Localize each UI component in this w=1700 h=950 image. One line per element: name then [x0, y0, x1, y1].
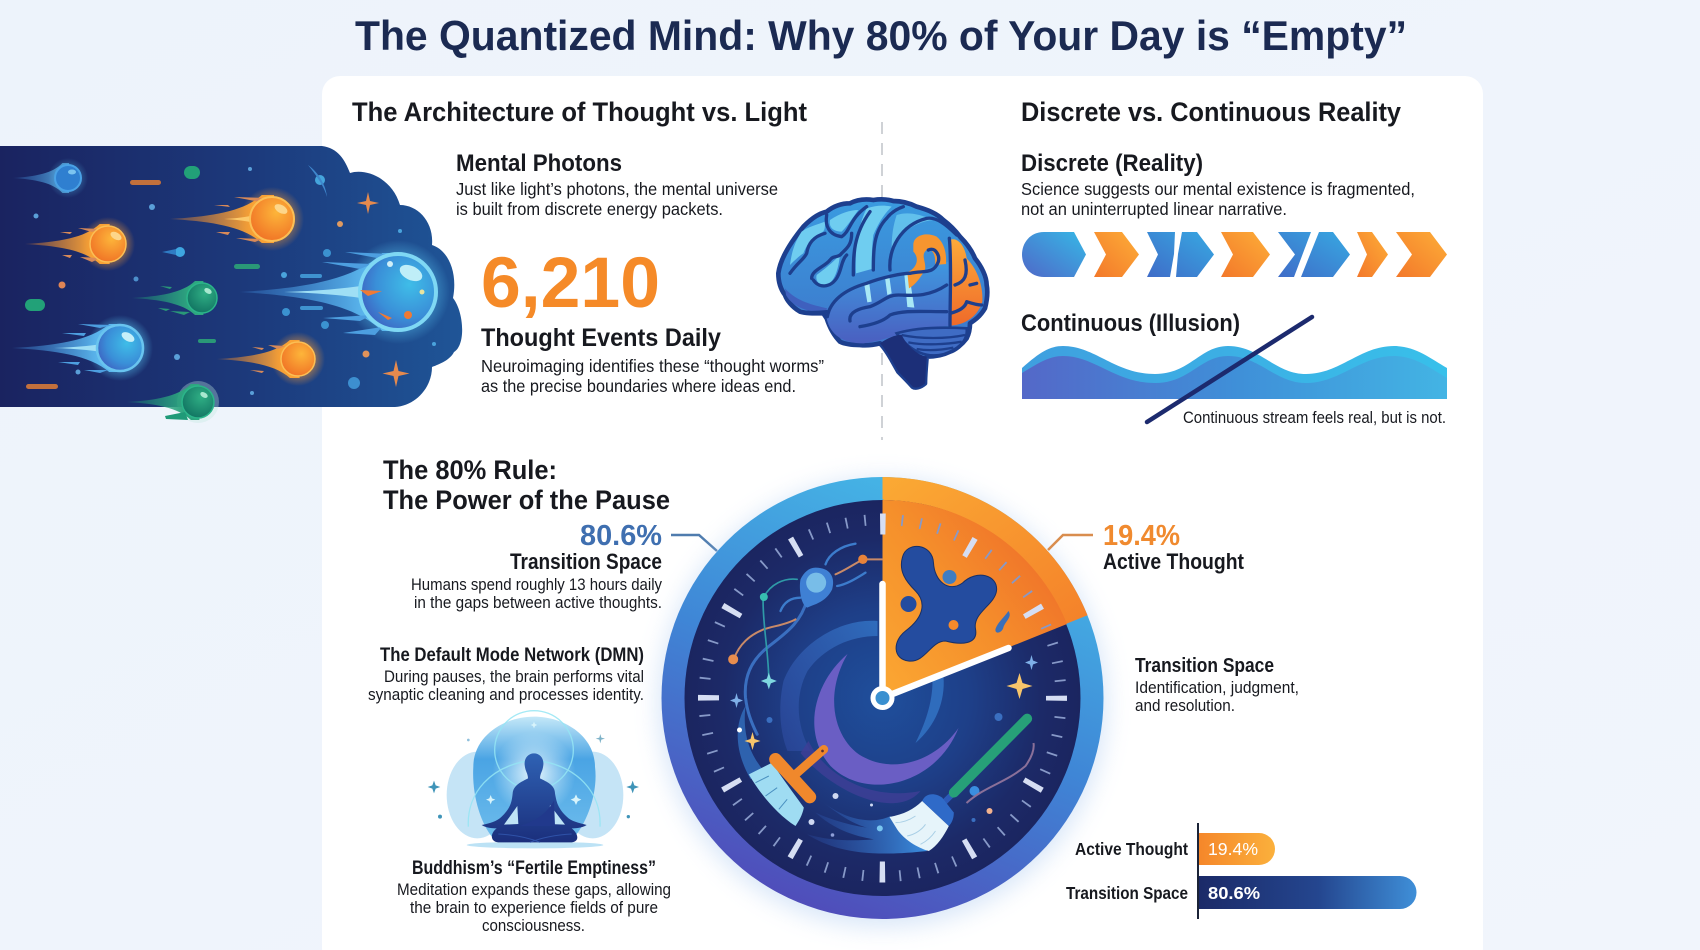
swirl [738, 621, 958, 803]
text block: transition space: and resolution. [1135, 697, 1235, 715]
row: transition space: 80.6% [1208, 883, 1260, 903]
text block: fertile emptiness: Buddhism’s “Fertile Emptiness” [412, 858, 656, 879]
sparkles on face [744, 673, 1032, 750]
text block: discrete reality: Discrete (Reality) [1021, 150, 1203, 177]
comet: green bottom [127, 381, 219, 423]
row: transition space: Transition Space [1066, 883, 1188, 903]
divider: dashed vertical [881, 122, 883, 440]
text block: default mode network: During pauses, the brain performs vital [384, 668, 644, 686]
text block: fertile emptiness: Meditation expands these gaps, allowing [397, 881, 671, 899]
callout: 80.6% transition space: in the gaps between active thoughts. [414, 594, 662, 612]
text block: discrete reality: not an uninterrupted linear narrative. [1021, 199, 1287, 219]
clock face [684, 500, 1080, 896]
text block: fertile emptiness: the brain to experience fields of pure [410, 899, 658, 917]
text block: default mode network: synaptic cleaning and processes identity. [368, 686, 644, 704]
stat: 6,210 thought events: Neuroimaging identifies these “thought worms” [481, 356, 824, 376]
text block: mental photons [456, 150, 778, 219]
chart: clock pie [658, 477, 1106, 927]
text block: mental photons: Just like light’s photons, the mental universe [456, 179, 778, 199]
silhouette [482, 753, 587, 842]
comet: orange left [25, 217, 135, 271]
comet: large blue [240, 240, 450, 344]
row: active thought: Active Thought [1075, 839, 1188, 859]
cerebellum [897, 328, 967, 355]
highlight stripes [864, 274, 914, 308]
panel: main white card [322, 76, 1483, 950]
heading: the 80% rule: The 80% Rule: [383, 455, 557, 485]
callout: 19.4% active thought [1048, 520, 1245, 574]
text block: mental photons: is built from discrete energy packets. [456, 199, 723, 219]
stat: 6,210 thought events [481, 244, 824, 396]
row: active thought: 19.4% [1208, 839, 1258, 859]
broom left [749, 749, 824, 826]
stat: 6,210 thought events: as the precise boundaries where ideas end. [481, 376, 796, 396]
trail [807, 803, 927, 854]
text block: transition space: Transition Space [1135, 655, 1274, 677]
blob: thought [896, 546, 1010, 661]
heading: discrete vs continuous: Discrete vs. Continuous Reality [1021, 97, 1401, 127]
comet: orange top [170, 187, 304, 251]
clock hands [873, 584, 1008, 708]
text block: transition space: Identification, judgment, [1135, 679, 1299, 697]
text block: mental photons: Mental Photons [456, 150, 622, 177]
callout: 19.4% active thought: Active Thought [1103, 549, 1245, 574]
comet: blue lower-left [12, 315, 153, 381]
illustration: mental photons comets [0, 146, 462, 423]
icon: meditating figure [428, 711, 639, 848]
heading: the 80% rule [383, 455, 670, 515]
row: active thought [1075, 833, 1275, 865]
heading: architecture of thought: The Architecture of Thought vs. Light [352, 97, 807, 127]
diagram: discrete chevrons [1022, 232, 1447, 277]
comet: orange lower [217, 332, 325, 386]
row: transition space [1066, 876, 1416, 909]
text block: discrete reality: Science suggests our mental existence is fragmented, [1021, 179, 1415, 199]
text block: discrete reality [1021, 150, 1415, 219]
neuron [728, 544, 882, 734]
callout: 19.4% active thought: 19.4% [1103, 520, 1180, 552]
comet: blue top-left [13, 158, 88, 198]
bar chart: active vs transition [1066, 823, 1416, 919]
comet: green middle [132, 281, 217, 315]
orange active lobes [907, 234, 982, 326]
sparkles [486, 722, 581, 805]
callout: 80.6% transition space: Humans spend roughly 13 hours daily [411, 576, 663, 594]
text block: default mode network: The Default Mode Network (DMN) [380, 645, 644, 666]
ring [662, 477, 1104, 919]
text block: default mode network [368, 645, 644, 704]
caption: continuous stream: Continuous stream feels real, but is not. [1183, 409, 1446, 427]
lower frontal lobe [785, 288, 827, 312]
chart: continuous wave [1022, 346, 1447, 399]
ticks [704, 520, 1061, 876]
icon: brain [778, 199, 987, 388]
brooms [749, 719, 1027, 854]
callout: 80.6% transition space: Transition Space [510, 549, 662, 574]
title: The Quantized Mind: Why 80% of Your Day is “Empty” [355, 12, 1407, 59]
callout: 80.6% transition space [411, 520, 717, 612]
temporal lobe [827, 262, 950, 343]
strike-through line [1147, 317, 1312, 422]
stat: 6,210 thought events: Thought Events Daily [481, 324, 721, 352]
wedge: 19.4% active [882, 500, 1067, 698]
heading: the 80% rule: The Power of the Pause [383, 485, 670, 515]
text block: fertile emptiness [397, 858, 671, 935]
brain stem [880, 335, 927, 388]
callout: 80.6% transition space: 80.6% [580, 520, 662, 552]
stat: 6,210 thought events: 6,210 [481, 244, 660, 323]
sulci [790, 207, 982, 327]
text block: fertile emptiness: consciousness. [482, 917, 585, 935]
ring: active thought segment [882, 477, 1088, 624]
light gyri [790, 206, 933, 285]
small particles [25, 165, 436, 395]
broom right [889, 719, 1027, 851]
heading: continuous illusion: Continuous (Illusion) [1021, 310, 1240, 337]
text block: transition space [1135, 655, 1299, 715]
